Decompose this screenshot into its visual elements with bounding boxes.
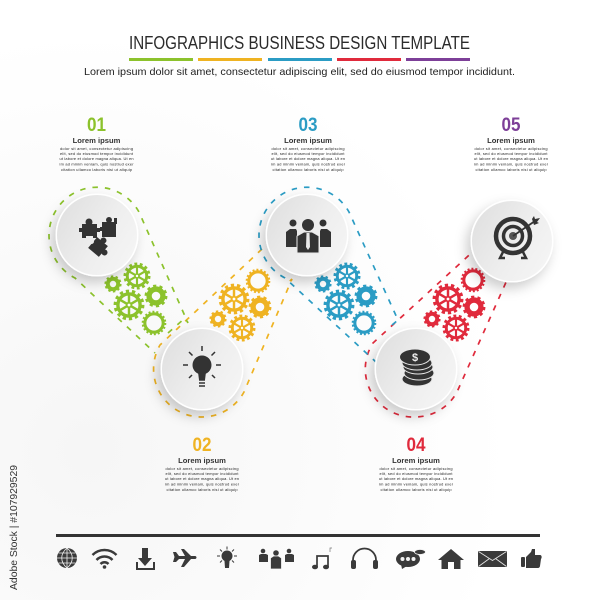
step 02 text: 02 (192, 435, 212, 456)
icon: globe (57, 548, 77, 568)
step 03 text: ut labore et dolore magna aliqua. Ut en (271, 156, 345, 161)
step 05 text: elit, sed do eiusmod tempor incididunt (474, 151, 548, 156)
icon: small light bulb (217, 546, 237, 568)
gears: red (424, 269, 484, 340)
vertical image credit: Adobe Stock | #107929529 (8, 465, 20, 590)
step 04 text: ut labore et dolore magna aliqua. Ut en (379, 476, 453, 481)
gears: green (105, 264, 166, 334)
icon: wifi (92, 550, 116, 569)
step 03 text: im ad minim veniam, quis nostrud exer (271, 162, 346, 166)
step 02 text: Lorem ipsum (178, 456, 226, 465)
dashed outline: green (49, 187, 188, 353)
step 01 text: dolor sit amet, consectetur adipiscing (60, 146, 133, 151)
step 02 text: ut labore et dolore magna aliqua. Ut en (165, 476, 239, 481)
icon: headphones (351, 549, 378, 569)
icon: airplane (173, 549, 196, 567)
step 02 text: elit, sed do eiusmod tempor incididunt (166, 471, 239, 476)
step 05 text: 05 (502, 115, 521, 136)
icon: chat bubble (396, 550, 426, 569)
title: INFOGRAPHICS BUSINESS DESIGN TEMPLATE (129, 33, 470, 53)
icon: envelope (478, 551, 507, 567)
dashed outline: blue (259, 187, 398, 362)
disc 1 with puzzle icon (56, 194, 138, 276)
step 04 text (379, 435, 454, 492)
step 04 text: citation ullamco laboris nisi ut aliquip (380, 487, 452, 492)
step 04 text: elit, sed do eiusmod tempor incididunt (380, 471, 453, 476)
icon: coin stack: $ (412, 352, 418, 364)
icon: people (259, 549, 294, 569)
step 05 text: dolor sit amet, consectetur adipiscing (474, 146, 548, 151)
disc 4 with coins icon (374, 328, 458, 410)
icon: music notes (312, 548, 332, 569)
title colour bars (129, 58, 470, 61)
step 05 text: ut labore et dolore magna aliqua. Ut en (474, 156, 548, 161)
icon: download (137, 548, 154, 569)
step 01 text: elit, sed do eiusmod tempor incididunt (60, 151, 134, 156)
bottom rule (56, 534, 540, 537)
subtitle: Lorem ipsum dolor sit amet, consectetur adipiscing elit, sed do eiusmod tempor incididunt. (84, 67, 515, 78)
step 03 text: dolor sit amet, consectetur adipiscing (272, 146, 344, 151)
step 02 text: im ad minim veniam, quis nostrud exer (165, 482, 240, 486)
icon row (57, 546, 542, 569)
step 04 text: dolor sit amet, consectetur adipiscing (380, 466, 452, 471)
step 02 text: citation ullamco laboris nisi ut aliquip (166, 487, 238, 492)
step 03 text: elit, sed do eiusmod tempor incididunt (272, 151, 345, 156)
icon: thumbs up (521, 549, 542, 568)
step 01 text: 01 (87, 115, 106, 136)
step 03 text: citation ullamco laboris nisi ut aliquip (272, 167, 344, 172)
icon: house (438, 549, 464, 569)
step 03 text (271, 115, 346, 172)
icon: target and arrow (496, 216, 540, 258)
step 05 text (474, 115, 549, 172)
step 01 text: ut labore et dolore magna aliqua. Ut en (60, 156, 134, 161)
icon: light bulb (183, 346, 221, 386)
step 01 text (60, 115, 134, 172)
disc 3 with people icon (266, 194, 348, 276)
gears: yellow (210, 270, 270, 340)
step 01 text: im ad minim veniam, quis nostrud exer (60, 162, 134, 166)
step 01 text: Lorem ipsum (73, 136, 121, 145)
disc 5 with target icon (470, 200, 554, 282)
dashed outline: red (365, 247, 507, 417)
step 02 text (165, 435, 240, 492)
step 05 text: citation ullamco laboris nisi ut aliquip (476, 167, 546, 172)
step 01 text: citation ullamco laboris nisi ut aliquip (61, 167, 132, 172)
icon: puzzle pieces (79, 217, 117, 260)
icon: business people (286, 219, 331, 253)
step 03 text: Lorem ipsum (284, 136, 332, 145)
dashed outline: yellow (154, 249, 292, 417)
step 05 text: Lorem ipsum (487, 136, 535, 145)
step 04 text: im ad minim veniam, quis nostrud exer (379, 482, 454, 486)
step 03 text: 03 (298, 115, 318, 136)
disc 2 with light bulb icon (160, 328, 244, 410)
step 04 text: 04 (406, 435, 426, 456)
step 04 text: Lorem ipsum (392, 456, 440, 465)
step 02 text: dolor sit amet, consectetur adipiscing (166, 466, 238, 471)
gears: blue (315, 264, 376, 334)
step 05 text: im ad minim veniam, quis nostrud exer (474, 162, 549, 166)
